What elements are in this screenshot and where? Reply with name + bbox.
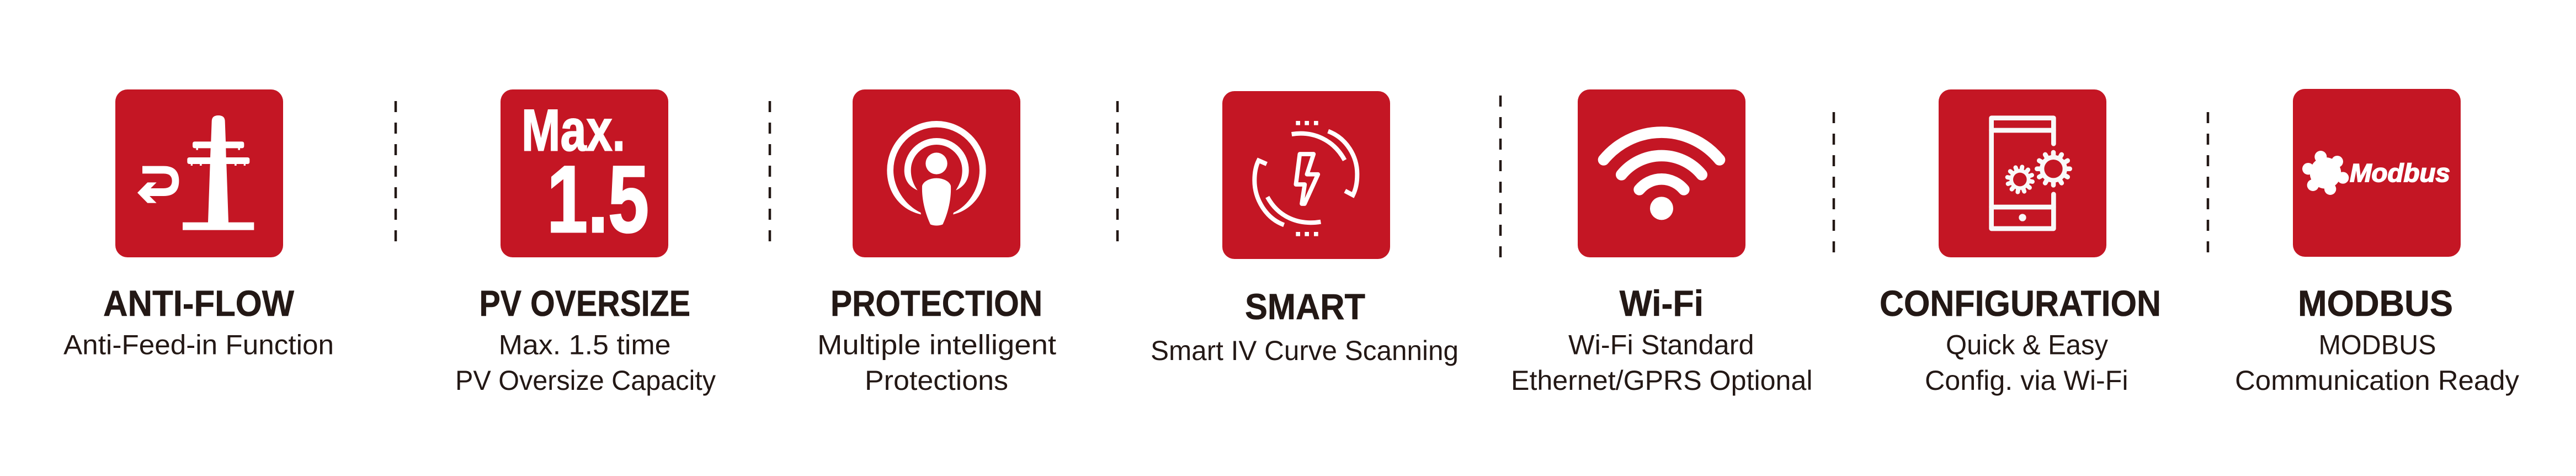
text: anti-flow description: Anti-Feed-in Function [63, 329, 334, 360]
heading: modbus: MODBUS [2298, 283, 2453, 324]
heading: protection: PROTECTION [831, 283, 1042, 324]
panel: anti-flow [63, 89, 334, 360]
icon: smart curve scanning bolt [1222, 91, 1390, 259]
text: modbus description: MODBUS [2319, 329, 2436, 360]
text: pv oversize description: Max. 1.5 time [499, 329, 671, 360]
heading: smart: SMART [1245, 286, 1365, 327]
panel: pv oversize [455, 89, 716, 396]
panel: modbus [2235, 89, 2519, 396]
text: smart description: Smart IV Curve Scanning [1151, 335, 1459, 366]
text: protection description: Protections [865, 365, 1008, 396]
text: wi-fi description: Ethernet/GPRS Optional [1511, 365, 1812, 396]
icon: max 1.5 [501, 89, 668, 257]
icon: protection rings and figure [853, 89, 1020, 257]
heading: wi-fi: Wi-Fi [1620, 283, 1704, 324]
heading: anti-flow: ANTI-FLOW [103, 283, 295, 324]
text: modbus description: Communication Ready [2235, 365, 2519, 396]
heading: pv oversize: PV OVERSIZE [479, 283, 690, 324]
icon: modbus logo: Modbus [2350, 158, 2450, 187]
panel: smart [1151, 91, 1459, 366]
panel: wi-fi [1511, 89, 1812, 396]
text: configuration description: Quick & Easy [1946, 329, 2108, 360]
icon: modbus logo [2293, 89, 2461, 257]
icon: wi-fi signal [1578, 89, 1745, 257]
text: configuration description: Config. via Wi-Fi [1925, 365, 2128, 396]
text: pv oversize description [455, 329, 716, 396]
icon: power pole with return arrow [115, 89, 283, 257]
panel: protection [817, 89, 1056, 396]
panel: configuration [1880, 89, 2161, 396]
text: wi-fi description [1511, 329, 1812, 396]
text: pv oversize description: PV Oversize Capacity [455, 365, 716, 396]
icon: phone with gears [1939, 89, 2106, 257]
icon: max 1.5: Max. [521, 97, 625, 163]
text: wi-fi description: Wi-Fi Standard [1568, 329, 1754, 360]
icon: max 1.5: 1.5 [547, 146, 649, 252]
text: protection description: Multiple intelligent [817, 329, 1056, 360]
text: modbus description [2235, 329, 2519, 396]
text: configuration description [1925, 329, 2128, 396]
heading: configuration: CONFIGURATION [1880, 283, 2161, 324]
text: protection description [817, 329, 1056, 396]
